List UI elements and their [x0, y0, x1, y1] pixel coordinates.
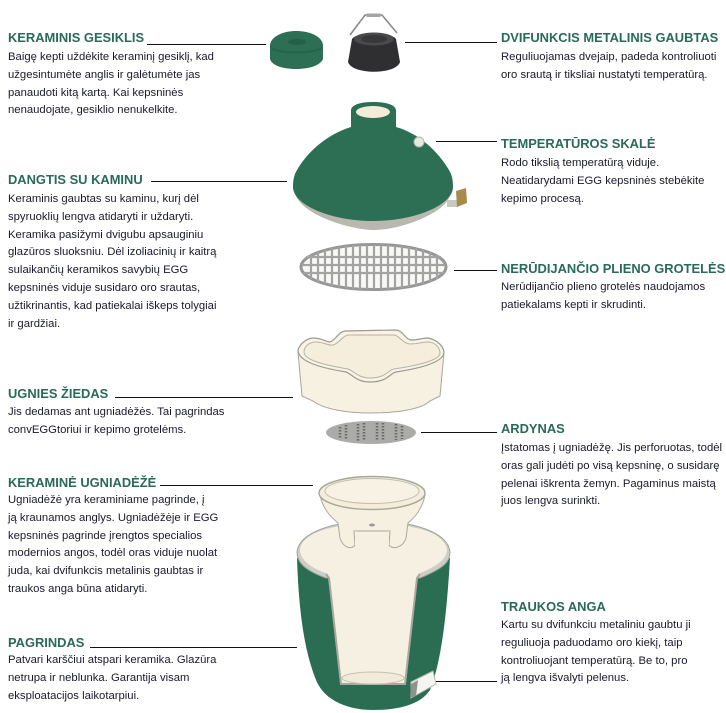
text: Traukos anga: reguliuoja paduodamo oro kiekį, taip [501, 637, 682, 649]
icon: fire ring [298, 330, 444, 413]
text: Temperatūros skalė: Neatidarydami EGG kepsninės stebėkite [501, 175, 704, 187]
text: Nerūdijančio plieno grotelės: patiekalams kepti ir skrudinti. [501, 299, 646, 311]
text: Temperatūros skalė [501, 157, 704, 205]
leader line: Keraminis gesiklis [147, 44, 266, 45]
text: Dangtis su kaminu: glazūros sluoksniu. Dėl izoliacinių ir kaitrą [8, 246, 216, 258]
text: Keraminė ugniadėžė: ją kraunamos anglys. Ugniadėžėje ir EGG [8, 512, 218, 524]
icon: base with cutaway [297, 521, 450, 710]
leader line: Pagrindas [90, 647, 297, 648]
heading: Nerūdijančio plieno grotelės: NERŪDIJANČIO PLIENO GROTELĖS [501, 261, 725, 276]
text: Keraminis gesiklis: nenaudojate, gesiklio nenukelkite. [8, 104, 178, 116]
text: Nerūdijančio plieno grotelės [501, 281, 705, 311]
heading: Dvifunkcis metalinis gaubtas: DVIFUNKCIS METALINIS GAUBTAS [501, 30, 718, 45]
text: Keraminis gesiklis: užgesintumėte anglis ir galėtumėte jas [8, 69, 200, 81]
text: Ardynas: pelenai iškrenta žemyn. Pagaminus maistą [501, 478, 716, 490]
icon: dual function metal top [348, 14, 400, 72]
heading: Ugnies žiedas: UGNIES ŽIEDAS [8, 386, 108, 401]
text: Ardynas: juos lengva surinkti. [501, 495, 600, 507]
leader line: Temperatūros skalė [436, 141, 497, 142]
text: Dvifunkcis metalinis gaubtas: Reguliuojamas dvejaip, padeda kontroliuoti [501, 51, 716, 63]
text: Dangtis su kaminu: ir gardžiai. [8, 318, 60, 330]
text: Keraminė ugniadėžė [8, 494, 218, 595]
icon: ceramic firebox [319, 476, 425, 548]
text: Keraminė ugniadėžė: juda, kai dvifunkcis metalinis gaubtas ir [8, 565, 203, 577]
text: Pagrindas [8, 654, 216, 702]
text: Ugnies žiedas: Jis dedamas ant ugniadėžės. Tai pagrindas [8, 406, 224, 418]
text: Traukos anga: ją lengva išvalyti pelenus. [501, 672, 629, 684]
text: Pagrindas: netrupa ir neblunka. Garantija visam [8, 672, 189, 684]
heading: Ardynas: ARDYNAS [501, 421, 565, 436]
leader line: Ugnies žiedas [115, 397, 293, 398]
text: Temperatūros skalė: Rodo tikslią temperatūrą viduje. [501, 157, 659, 169]
text: Ardynas: oras gali judėti po visą kepsninę, o susidarę [501, 460, 720, 472]
heading: Traukos anga: TRAUKOS ANGA [501, 599, 606, 614]
text: Dangtis su kaminu: sulaikančių keramikos savybių EGG [8, 264, 188, 276]
text: Temperatūros skalė: kepimo procesą. [501, 193, 584, 205]
text: Ugnies žiedas [8, 406, 224, 436]
text: Dangtis su kaminu: Keraminis gaubtas su kaminu, kurį dėl [8, 193, 199, 205]
icon: stainless steel grid [301, 244, 446, 290]
heading: Temperatūros skalė: TEMPERATŪROS SKALĖ [501, 136, 655, 151]
text: Ardynas: Įstatomas į ugniadėžę. Jis perforuotas, todėl [501, 442, 722, 454]
text: Keraminis gesiklis [8, 51, 214, 116]
text: Keraminė ugniadėžė: modernios angos, todėl oras viduje nuolat [8, 547, 217, 559]
heading: Keraminis gesiklis: KERAMINIS GESIKLIS [8, 30, 144, 45]
heading: Pagrindas: PAGRINDAS [8, 635, 84, 650]
text: Traukos anga [500, 619, 691, 684]
leader line: Nerūdijančio plieno grotelės [454, 270, 497, 271]
icon: ceramic snuffer cap [270, 31, 323, 69]
text: Pagrindas: Patvari karščiui atspari keramika. Glazūra [8, 654, 216, 666]
icon: dome with chimney [293, 102, 467, 230]
heading: Keraminė ugniadėžė: KERAMINĖ UGNIADĖŽĖ [8, 475, 156, 490]
text: Pagrindas: eksploatacijos laikotarpiui. [8, 690, 139, 702]
text: Traukos anga: Kartu su dvifunkciu metaliniu gaubtu ji [501, 619, 691, 631]
text: Dangtis su kaminu: Keramika pasižymi dvigubu apsauginiu [8, 229, 203, 241]
text: Keraminis gesiklis: panaudoti kitą kartą. Kai kepsninės [8, 87, 183, 99]
icon: perforated ash grate [326, 421, 416, 444]
leader line: Dangtis su kaminu [151, 181, 287, 182]
text: Keraminė ugniadėžė: Ugniadėžė yra keraminiame pagrinde, į [8, 494, 205, 506]
text: Traukos anga: kontroliuojant temperatūrą. Be to, pro [501, 655, 688, 667]
text: Dangtis su kaminu [8, 193, 216, 330]
text: Keraminė ugniadėžė: kepsninės pagrinde įrengtos specialios [8, 530, 202, 542]
text: Dangtis su kaminu: užtikrinantis, kad patiekalai iškeps tolygiai [8, 300, 216, 312]
text: Ardynas [500, 442, 722, 507]
heading: Dangtis su kaminu: DANGTIS SU KAMINU [8, 172, 143, 187]
text: Dangtis su kaminu: spyruoklių lengva atidaryti ir uždaryti. [8, 211, 193, 223]
leader line: Ardynas [421, 432, 497, 433]
text: Dvifunkcis metalinis gaubtas [501, 51, 716, 81]
text: Nerūdijančio plieno grotelės: Nerūdijančio plieno grotelės naudojamos [501, 281, 705, 293]
text: Ugnies žiedas: convEGGtoriui ir kepimo grotelėms. [8, 424, 186, 436]
text: Keraminė ugniadėžė: traukos anga būna atidaryti. [8, 583, 147, 595]
leader line: Dvifunkcis metalinis gaubtas [405, 42, 497, 43]
leader line: Traukos anga [436, 681, 497, 682]
text: Keraminis gesiklis: Baigę kepti uždėkite keraminį gesiklį, kad [8, 51, 214, 63]
text: Dvifunkcis metalinis gaubtas: oro srautą ir tiksliai nustatyti temperatūrą. [501, 69, 708, 81]
leader line: Keraminė ugniadėžė [160, 485, 313, 486]
text: Dangtis su kaminu: kepsninės viduje susidaro oro srautas, [8, 282, 200, 294]
